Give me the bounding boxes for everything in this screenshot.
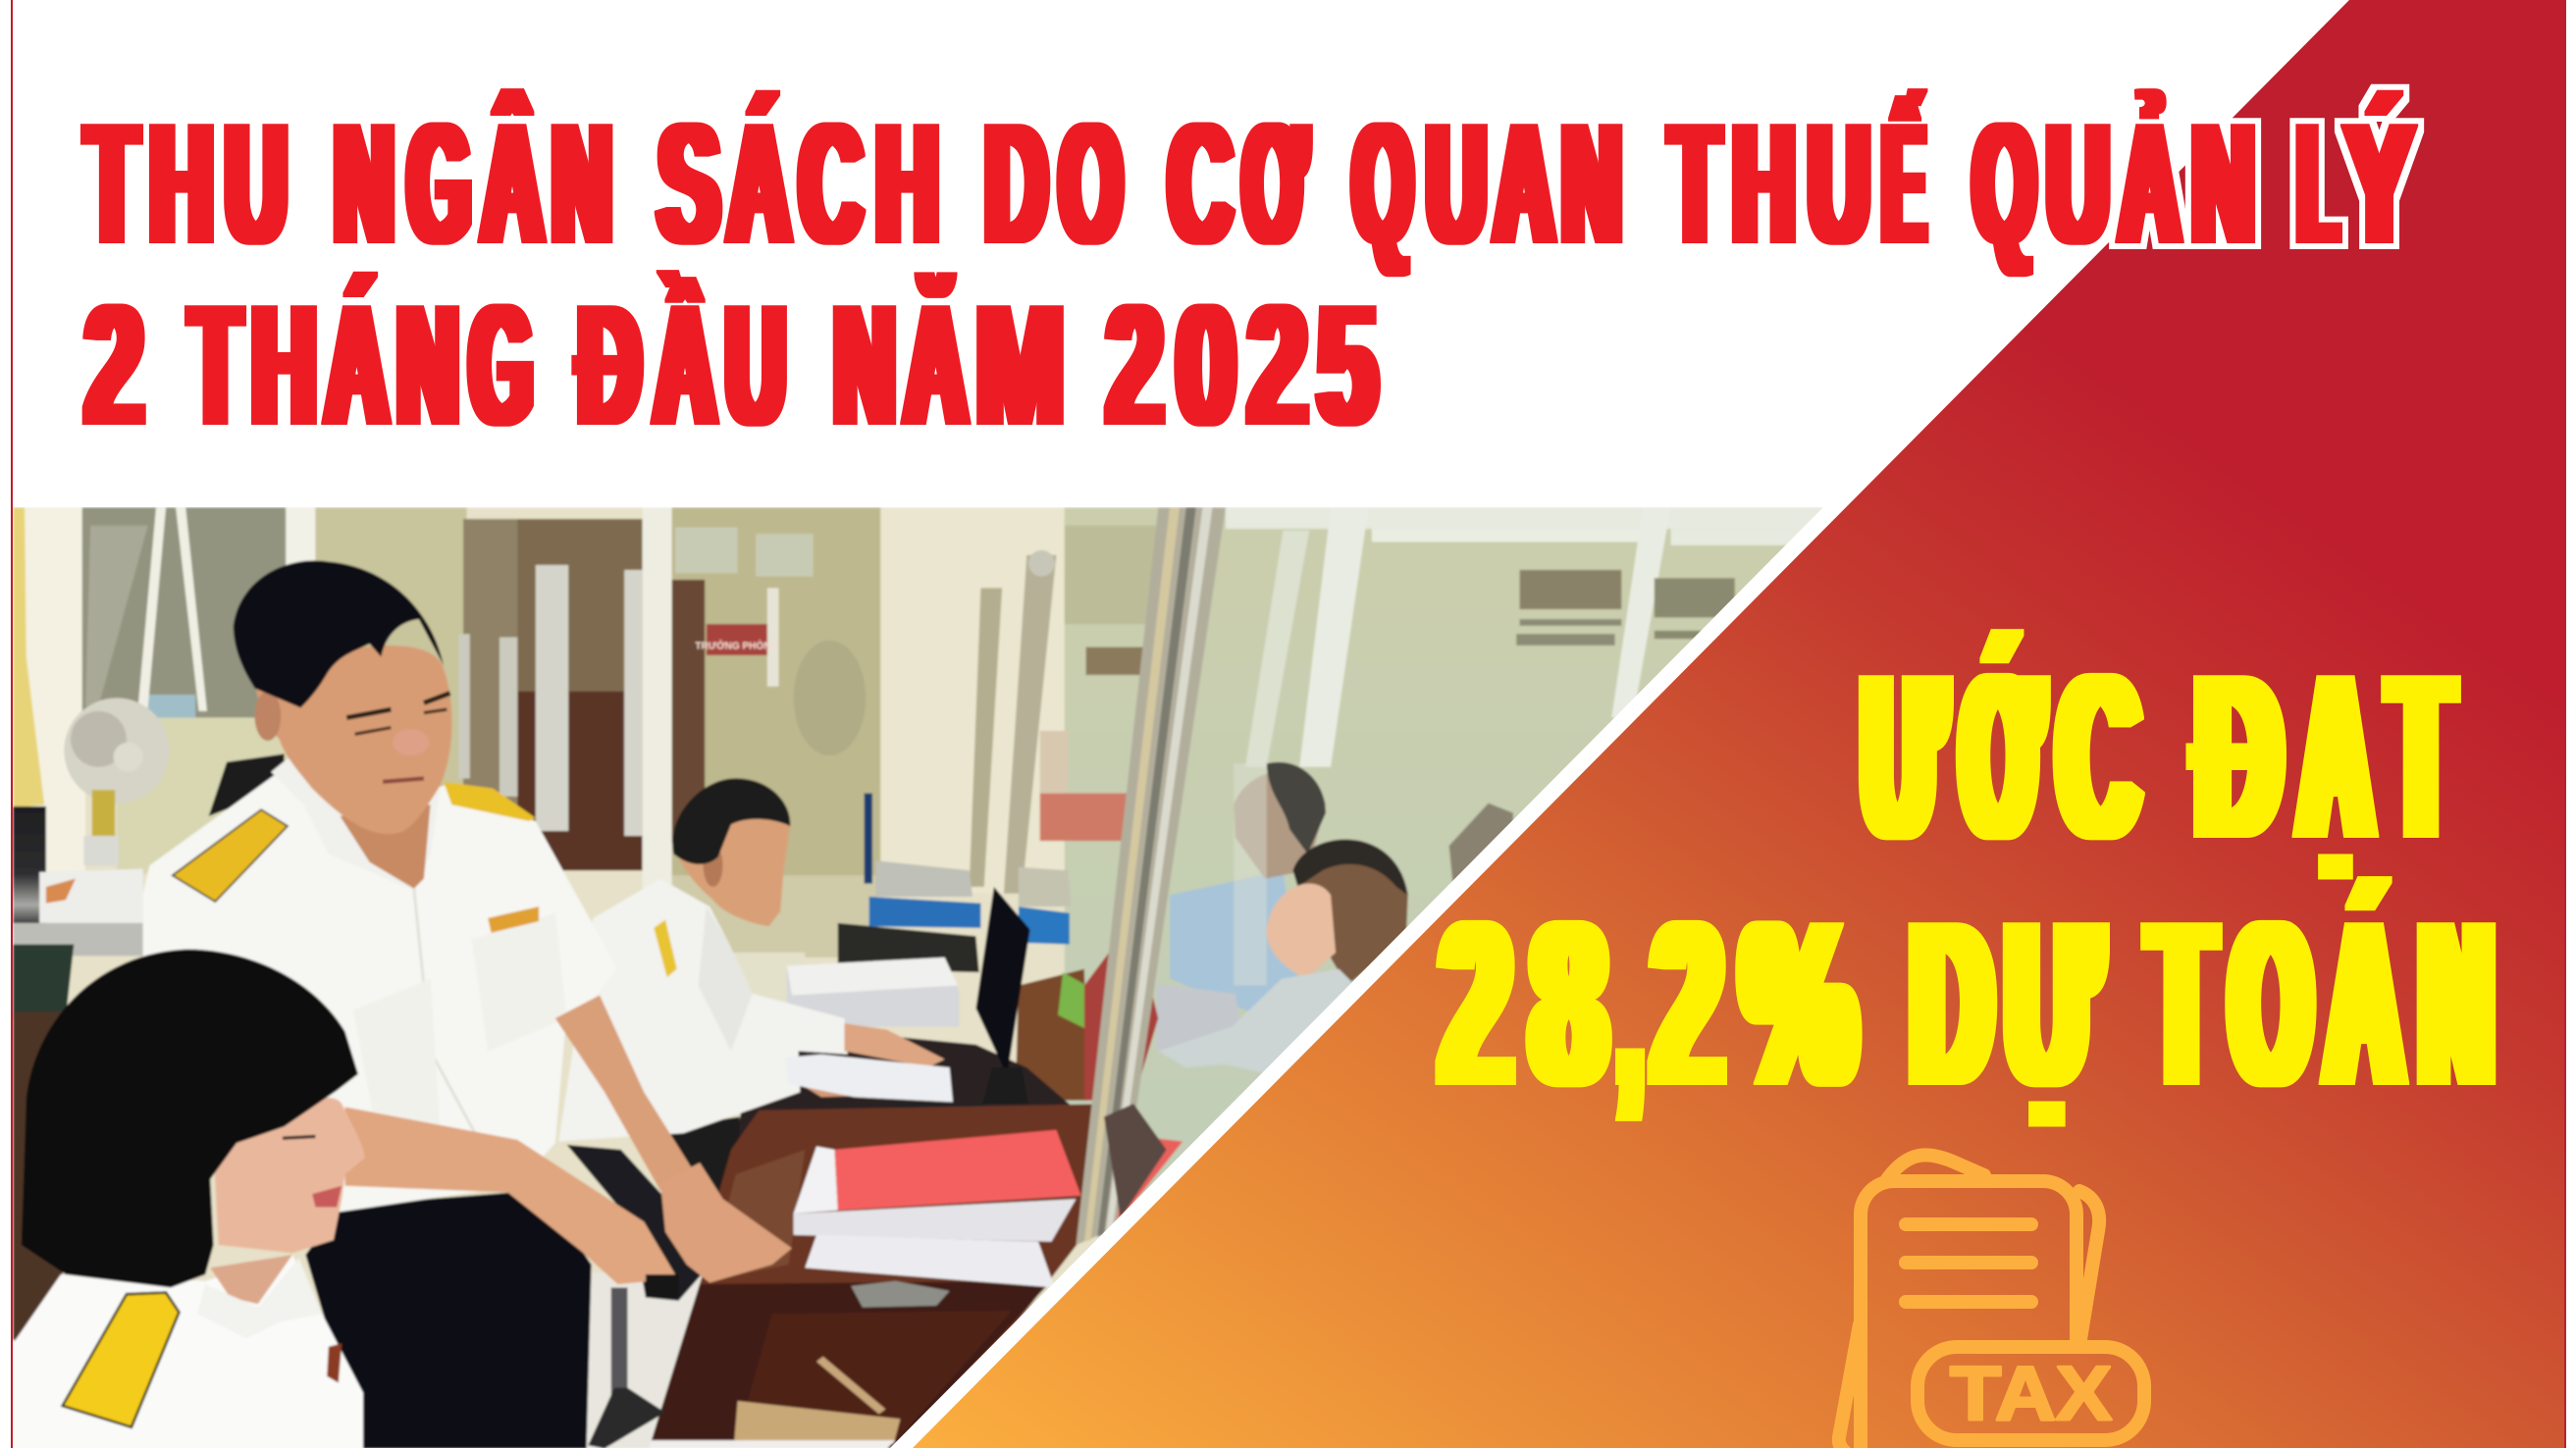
headline: estimate 28.2 percent: , bbox=[1622, 874, 1638, 1134]
paper stack behind bbox=[787, 957, 960, 1026]
center officer bbox=[143, 560, 792, 1448]
title: L bbox=[2298, 87, 2338, 279]
title: Ả bbox=[2120, 87, 2180, 279]
headline: estimate 28.2 percent: % bbox=[1743, 874, 1855, 1134]
title: U bbox=[726, 269, 785, 460]
title: T bbox=[86, 87, 137, 279]
title: N bbox=[2192, 87, 2254, 279]
red folder on paper stacks bbox=[794, 1130, 1081, 1308]
counter partition pole bbox=[1077, 507, 1226, 1245]
title: N bbox=[834, 269, 895, 460]
title: U bbox=[2047, 87, 2109, 279]
title: D bbox=[985, 87, 1047, 279]
title: Á bbox=[326, 269, 388, 460]
title: H bbox=[1733, 87, 1795, 279]
headline: estimate 28.2 percent bbox=[1442, 627, 2492, 1134]
headline: estimate 28.2 percent: T bbox=[2150, 874, 2213, 1134]
title: Â bbox=[482, 87, 543, 279]
title: C bbox=[800, 87, 862, 279]
title: N bbox=[335, 87, 394, 279]
title: T bbox=[190, 269, 240, 460]
title: U bbox=[1427, 87, 1486, 279]
title: S bbox=[658, 87, 719, 279]
headline: estimate 28.2 percent: C bbox=[2059, 627, 2137, 887]
left desk area with fan and monitor bbox=[13, 698, 285, 1340]
title: Ế bbox=[1883, 87, 1924, 279]
title: 5 bbox=[1318, 269, 1377, 460]
main wooden desk bbox=[638, 1104, 1150, 1448]
title: H bbox=[876, 87, 938, 279]
title: Ầ bbox=[655, 269, 715, 460]
title: 2 bbox=[1107, 269, 1163, 460]
title: H bbox=[252, 269, 316, 460]
title: M bbox=[976, 269, 1064, 460]
headline: estimate 28.2 percent: 2 bbox=[1654, 874, 1721, 1134]
monitor bbox=[975, 887, 1030, 1076]
icon: tax document bbox=[1839, 1155, 2144, 1448]
title: T bbox=[1670, 87, 1719, 279]
customers behind the glass bbox=[1157, 762, 1408, 1084]
headline: estimate 28.2 percent: Ớ bbox=[1963, 627, 2040, 887]
headline: estimate 28.2 percent: O bbox=[2232, 874, 2310, 1134]
title: N bbox=[397, 269, 458, 460]
floor and chair bbox=[567, 1145, 704, 1448]
headline: estimate 28.2 percent: Ự bbox=[2007, 874, 2099, 1134]
headline: estimate 28.2 percent: Á bbox=[2327, 874, 2401, 1134]
photo: tax officers at the service counter bbox=[13, 507, 1853, 1448]
door sign: TRƯỞNG PHÒNG bbox=[695, 639, 778, 651]
title: 2 bbox=[1248, 269, 1307, 460]
seated woman officer bbox=[13, 950, 365, 1448]
title: 0 bbox=[1177, 269, 1235, 460]
title: Q bbox=[1973, 87, 2035, 279]
door sign bbox=[695, 624, 778, 655]
headline: estimate 28.2 percent: Đ bbox=[2196, 627, 2281, 887]
items on the back desk bbox=[838, 794, 1158, 1101]
icon: tax document: TAX bbox=[1950, 1350, 2112, 1436]
title: G bbox=[408, 87, 470, 279]
title: Q bbox=[1353, 87, 1412, 279]
title: 2 bbox=[85, 269, 143, 460]
panel: red-orange diagonal gradient bbox=[913, 0, 2566, 1448]
title bbox=[85, 87, 2413, 460]
headline: estimate 28.2 percent: T bbox=[2391, 627, 2451, 887]
headline: estimate 28.2 percent: 2 bbox=[1442, 874, 1510, 1134]
title: Đ bbox=[578, 269, 641, 460]
title: C bbox=[1169, 87, 1232, 279]
title: U bbox=[226, 87, 287, 279]
title: Ă bbox=[905, 269, 967, 460]
title: H bbox=[150, 87, 213, 279]
title: O bbox=[1060, 87, 1122, 279]
headline: estimate 28.2 percent: D bbox=[1912, 874, 1991, 1134]
left border line bbox=[11, 0, 13, 1448]
title: G bbox=[470, 269, 532, 460]
title: Ý bbox=[2345, 87, 2413, 279]
title: U bbox=[1809, 87, 1869, 279]
headline: estimate 28.2 percent: Ạ bbox=[2300, 627, 2371, 887]
title: N bbox=[1562, 87, 1621, 279]
title: Ơ bbox=[1243, 87, 1306, 279]
headline: estimate 28.2 percent: Ư bbox=[1864, 627, 1943, 887]
back officer bbox=[558, 778, 945, 1223]
right border line bbox=[2564, 0, 2566, 1448]
title: A bbox=[1495, 87, 1553, 279]
title: Á bbox=[728, 87, 790, 279]
title: N bbox=[552, 87, 611, 279]
headline: estimate 28.2 percent: 8 bbox=[1532, 874, 1605, 1134]
